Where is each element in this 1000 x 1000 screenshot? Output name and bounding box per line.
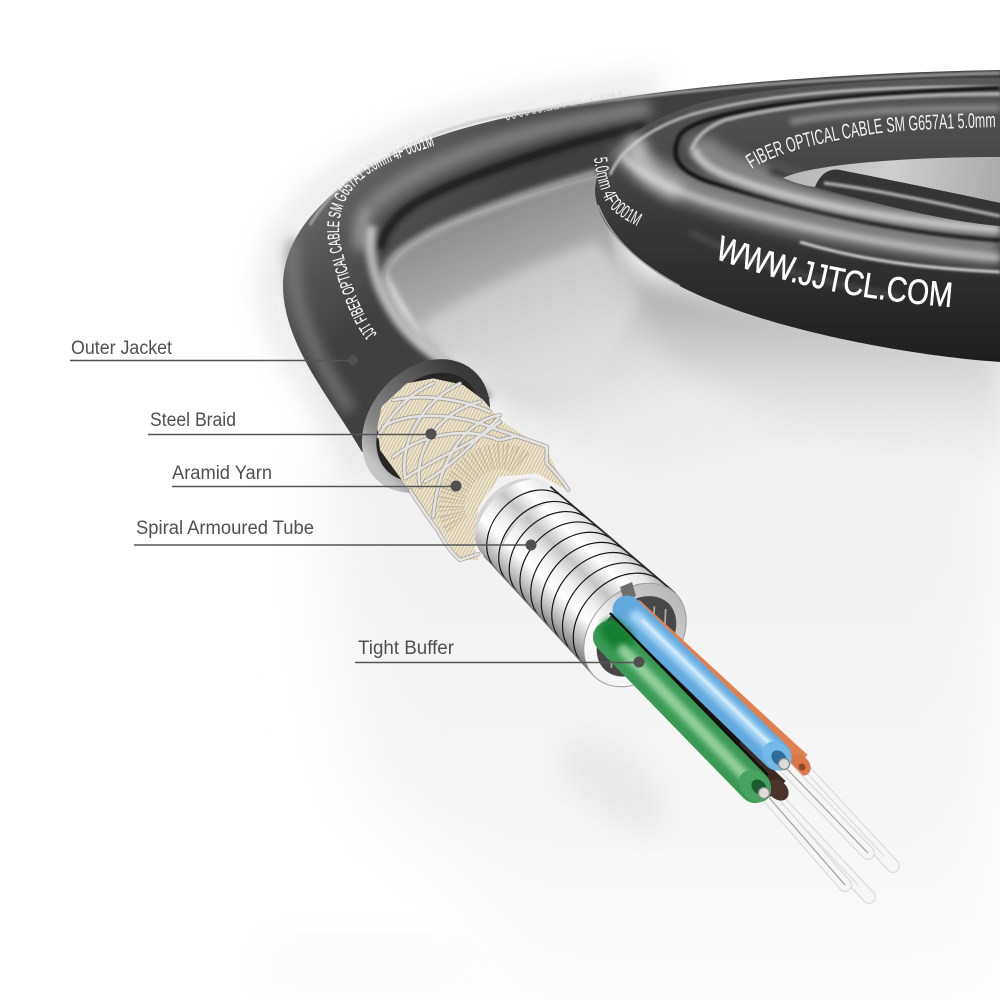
valley between coil rings [675,88,1000,240]
printed text: fibre specification: FIBER OPTICAL CABLE SM G657A1 5.0mm [745,113,996,168]
second coil ring highlights [692,94,1000,230]
jacket cut end ring [335,333,517,519]
jacket lower lip highlight [292,73,1000,410]
centre opening of coil [783,157,1000,203]
label: steel braid [148,410,436,440]
yarn fringe at tube [433,438,542,547]
main cable outer jacket [279,70,1000,452]
printed text: web address: WWW.JJTCL.COM [719,235,952,308]
label: tight buffer [355,638,644,668]
spiral armoured tube [474,478,687,688]
glass fibre: brown core [780,802,869,897]
label: aramid yarn: Aramid Yarn [172,463,272,484]
tube opening rim [563,563,707,707]
tube edge lines [550,479,675,600]
soft ambient shadows on the surface [256,72,990,848]
printed text: fibre count and length: 5.0mm 4F 0001M [594,157,642,226]
green buffer [609,630,778,809]
armour ring seams [486,489,659,664]
tube lower edge line [477,556,602,677]
glass fibre: blue core [785,767,868,853]
tube interior [581,580,692,692]
label: spiral armoured tube [134,518,536,550]
blue buffer [627,610,798,777]
armour rings [475,478,665,668]
coiled cable, front rings [594,78,1000,362]
label: spiral armoured tube: Spiral Armoured Tube [136,518,314,539]
steel braid mesh [378,383,568,560]
label: tight buffer: Tight Buffer [358,638,455,659]
printed text on main cable: JJT FIBER OPTICAL CABLE SM G657A1 5.0mm 4F 0001M [327,134,434,340]
label: outer jacket: Outer Jacket [71,338,173,359]
faint web address on main cable: WWW.JJTCL.COM [505,92,621,120]
glass fibre: orange core [805,771,893,866]
outer coil rim [598,205,680,286]
slit in tube end [620,582,636,601]
inner coil tail [815,170,1000,226]
infographic: armoured fiber optic cable cross-section [70,70,1000,904]
label: aramid yarn [172,463,462,492]
floor reflection inside cable loop [384,165,1000,470]
outer coil shoulder highlights [610,87,1000,297]
dark gap between buffers [615,620,770,778]
brown buffer [735,748,793,805]
label: steel braid: Steel Braid [150,410,236,431]
glass fibre: green core [765,793,845,885]
outer coil ring [595,78,1000,362]
separator between buffers [610,613,768,775]
label: outer jacket [70,338,358,365]
aramid yarn [377,378,567,560]
tight buffer fibres [609,608,893,897]
orange buffer [632,608,815,780]
